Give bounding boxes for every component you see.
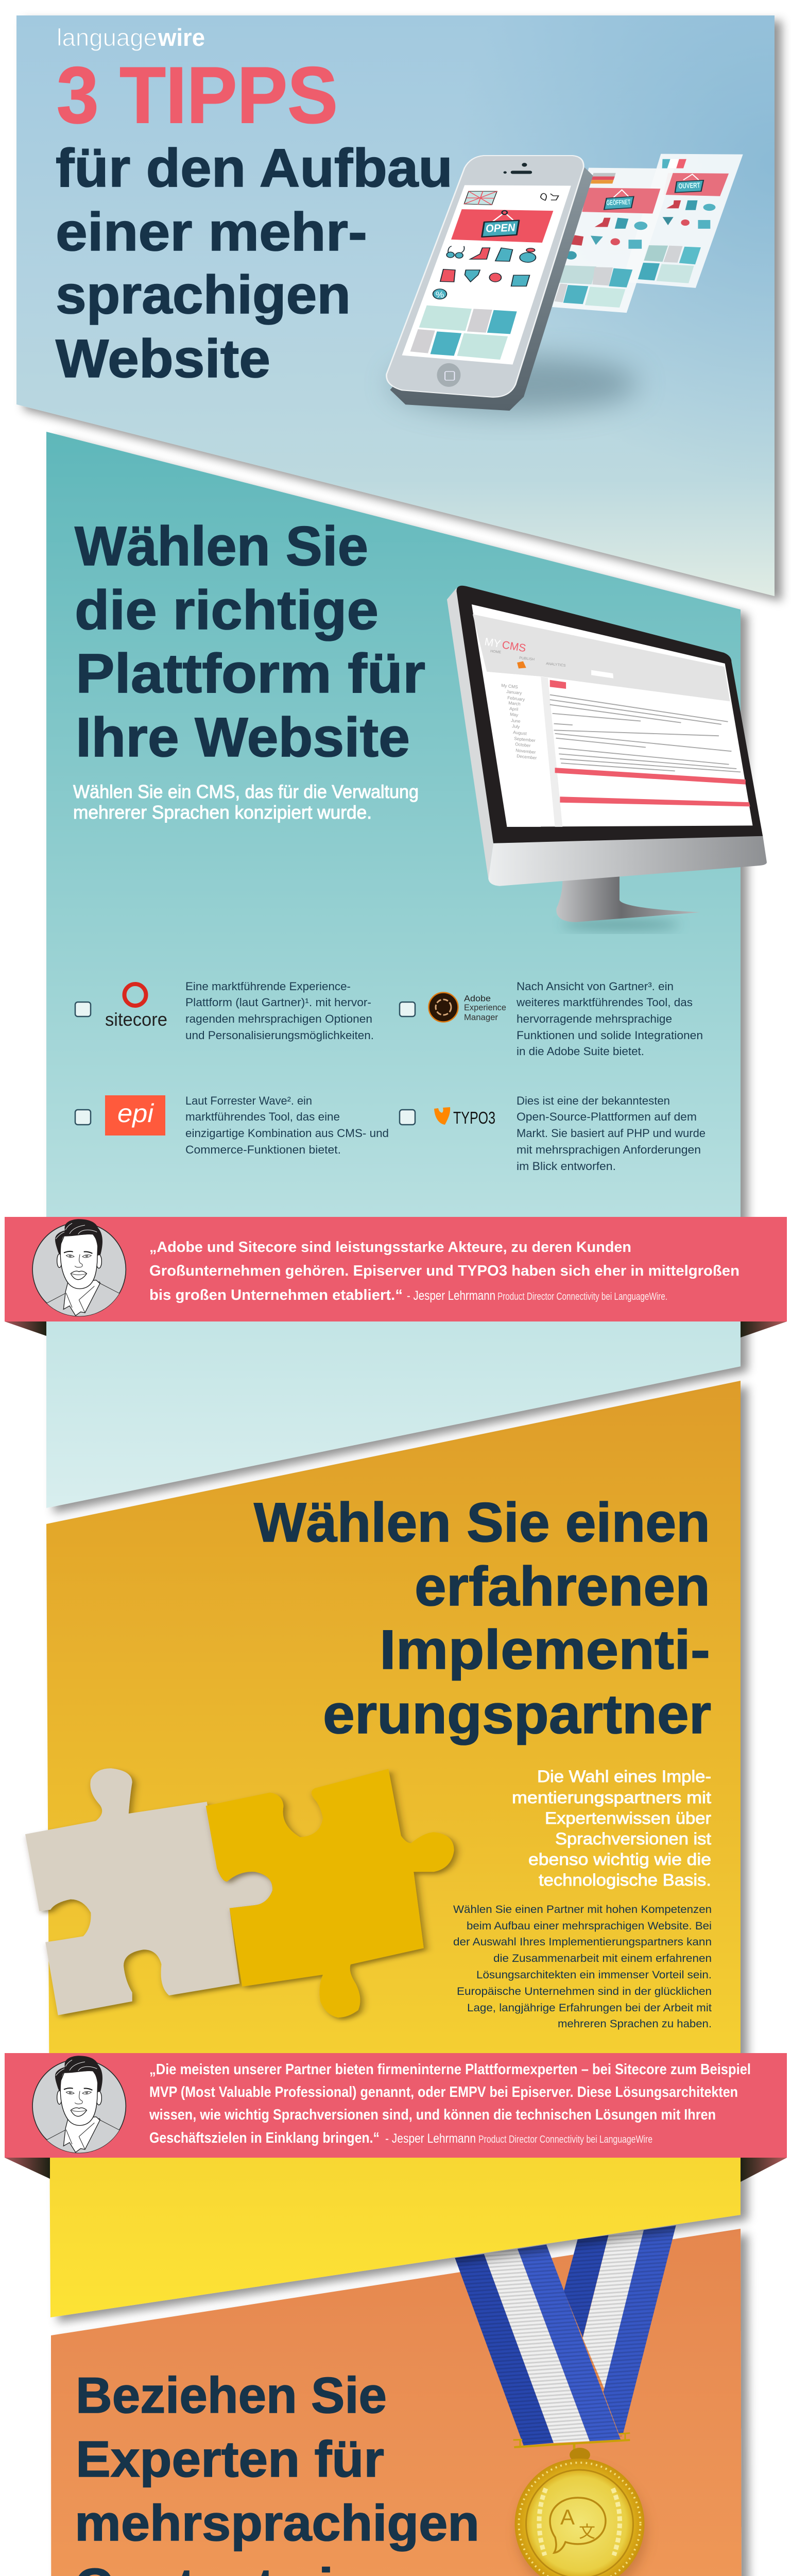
logo: Adobe: Adobe xyxy=(464,993,491,1004)
description xyxy=(185,1094,389,1156)
description: Markt. Sie basiert auf PHP und wurde xyxy=(517,1127,706,1140)
title: sprachigen xyxy=(56,265,351,325)
translate speech bubble: 文 xyxy=(579,2522,595,2541)
checkbox xyxy=(400,1002,415,1016)
platform option: TYPO3 xyxy=(400,1094,706,1173)
text block: Implementierungspartner intro: Expertenwissen über xyxy=(545,1809,711,1827)
text block: Implementierungspartner intro: Sprachversionen ist xyxy=(555,1829,711,1848)
heading: mehrsprachiger Content: Experten für xyxy=(76,2431,384,2487)
heading: Plattform: Ihre Website xyxy=(76,706,410,768)
description: Nach Ansicht von Gartner³. ein xyxy=(517,980,674,993)
text block: CMS intro: mehrerer Sprachen konzipiert wurde. xyxy=(73,802,372,823)
text block: Implementierungspartner intro xyxy=(512,1767,711,1889)
CMS header xyxy=(473,614,730,701)
heading: Plattform xyxy=(75,515,425,768)
title: 3 TIPPS xyxy=(57,50,338,140)
checkbox xyxy=(75,1002,91,1016)
description: mit mehrsprachigen Anforderungen xyxy=(517,1143,701,1156)
CMS labels: HOME xyxy=(490,650,502,654)
illustration: smartphone with localized shop pages xyxy=(387,154,743,411)
logo: Sitecore: sitecore xyxy=(105,1009,167,1030)
heading: Implementierungspartner: Implementi- xyxy=(380,1618,710,1681)
portrait xyxy=(21,1219,141,1331)
text block: Implementierungspartner body: Europäische Unternehmen sind in der glücklichen xyxy=(457,1986,712,1997)
description: Commerce-Funktionen bietet. xyxy=(185,1143,341,1156)
logo: Adobe xyxy=(428,992,506,1022)
CMS labels: ANALYTICS xyxy=(546,662,566,668)
CMS labels: March xyxy=(508,700,521,706)
translate speech bubble xyxy=(550,2498,606,2553)
quote band 2 xyxy=(5,2053,787,2182)
description: marktführendes Tool, das eine xyxy=(185,1110,340,1123)
red banner with OPEN sign xyxy=(451,209,553,243)
panel 2: Plattform background xyxy=(46,432,741,1508)
logo: Adobe: Manager xyxy=(464,1012,498,1022)
heading: Plattform: die richtige xyxy=(75,579,379,641)
monitor screen xyxy=(472,604,753,827)
quote text: Geschäftszielen in Einklang bringen.“ xyxy=(149,2130,380,2146)
description: Laut Forrester Wave². ein xyxy=(185,1094,312,1107)
monitor bezel xyxy=(457,586,763,843)
text block: Implementierungspartner body: beim Aufbau einer mehrsprachigen Website. Bei xyxy=(467,1920,712,1932)
quote text: Product Director Connectivity bei LanguageWire xyxy=(478,2134,652,2145)
CMS labels xyxy=(490,650,566,760)
illustration: desktop monitor with CMS: MY xyxy=(484,636,502,650)
description: ragenden mehrsprachigen Optionen xyxy=(185,1012,372,1025)
CMS labels: July xyxy=(512,723,521,730)
heading: Implementierungspartner: Wählen Sie einen xyxy=(254,1491,710,1553)
illustration: desktop monitor with CMS xyxy=(447,586,767,929)
icon: gold medal xyxy=(515,2448,646,2576)
icon: medal ribbon xyxy=(455,2225,676,2453)
title: Website xyxy=(56,329,270,389)
UK flag xyxy=(464,191,497,205)
header logo: wire xyxy=(158,24,205,51)
platform option: Sitecore xyxy=(75,980,374,1042)
text block: Implementierungspartner body: Lösungsarchitekten ein immenser Vorteil sein. xyxy=(476,1969,712,1981)
grey puzzle piece xyxy=(25,1768,272,2015)
German page card: GEÖFFNET xyxy=(606,198,631,207)
heading: mehrsprachiger Content: mehrsprachigen xyxy=(75,2495,479,2551)
phone home button xyxy=(437,363,460,387)
text block: Implementierungspartner body: Lage, langjährige Erfahrungen bei der Arbeit mit xyxy=(467,2002,712,2014)
logo: TYPO3: TYPO3 xyxy=(453,1108,495,1127)
wreath xyxy=(539,2488,620,2555)
description: Funktionen und solide Integrationen xyxy=(517,1029,703,1042)
text block: Implementierungspartner body: Wählen Sie einen Partner mit hohen Kompetenzen xyxy=(453,1904,712,1916)
illustration: desktop monitor with CMS: CMS xyxy=(501,639,527,654)
title xyxy=(56,50,453,389)
title: einer mehr- xyxy=(56,202,367,262)
quote text: „Adobe und Sitecore sind leistungsstarke Akteure, zu deren Kunden xyxy=(149,1239,631,1256)
CMS labels: PUBLISH xyxy=(519,656,535,662)
yellow puzzle piece xyxy=(206,1769,454,2018)
heading: mehrsprachiger Content: Beziehen Sie xyxy=(76,2367,387,2424)
CMS labels: November xyxy=(515,748,536,755)
phone shadow xyxy=(391,355,639,412)
quote text: bis großen Unternehmen etabliert.“ xyxy=(149,1287,403,1303)
red banner with OPEN sign: OPEN xyxy=(485,222,516,235)
checkbox xyxy=(75,1110,91,1125)
logo: Episerver: epi xyxy=(117,1099,154,1128)
CMS labels: October xyxy=(515,741,531,748)
CMS labels: January xyxy=(506,689,523,696)
quote text xyxy=(149,2061,751,2146)
French page card: OUVERT xyxy=(678,181,701,190)
heading: mehrsprachiger Content xyxy=(75,2367,479,2576)
logo: Adobe: Experience xyxy=(464,1003,506,1012)
text block: Implementierungspartner intro: technologische Basis. xyxy=(539,1871,711,1889)
phone speaker and camera xyxy=(504,163,532,174)
header logo: language xyxy=(57,24,157,51)
panel 3: Implementierungspartner background xyxy=(46,1381,741,2317)
title: für den Aufbau xyxy=(56,138,453,198)
heading: Implementierungspartner xyxy=(254,1491,711,1745)
monitor silver frame xyxy=(447,588,493,879)
colour blocks xyxy=(410,306,517,360)
quote text: Großunternehmen gehören. Episerver und TYPO3 haben sich eher in mittelgroßen xyxy=(149,1263,740,1279)
text block: Implementierungspartner intro: Die Wahl eines Imple- xyxy=(537,1767,711,1786)
text block: CMS intro: Wählen Sie ein CMS, das für die Verwaltung xyxy=(73,781,419,802)
description: einzigartige Kombination aus CMS- und xyxy=(185,1127,389,1140)
quote text: - Jesper Lehrmann xyxy=(385,2131,476,2146)
heading: Plattform: Plattform für xyxy=(76,642,425,704)
panel 1: title background xyxy=(16,15,775,596)
CMS red bars xyxy=(555,768,750,806)
heading: Plattform: Wählen Sie xyxy=(75,515,368,577)
description: Dies ist eine der bekanntesten xyxy=(517,1094,670,1107)
heading: Implementierungspartner: erungspartner xyxy=(323,1683,711,1745)
monitor stand xyxy=(556,876,700,922)
CMS labels: May xyxy=(510,711,519,718)
phone screen xyxy=(402,185,571,365)
ribbon folds xyxy=(5,1321,787,1337)
shop product icons xyxy=(433,246,536,299)
ribbon folds xyxy=(5,2158,787,2182)
CMS body text lines xyxy=(550,695,741,772)
logo: Episerver xyxy=(105,1095,165,1136)
quote text: Product Director Connectivity bei LanguageWire. xyxy=(497,1291,667,1302)
description xyxy=(516,980,703,1058)
description: hervorragende mehrsprachige xyxy=(517,1012,672,1025)
checkbox xyxy=(400,1110,415,1125)
CMS labels: September xyxy=(514,736,536,743)
pin and cart icons xyxy=(541,193,559,200)
header logo xyxy=(57,24,205,51)
description xyxy=(185,980,374,1042)
text block: Implementierungspartner body: die Zusammenarbeit mit einem erfahrenen xyxy=(493,1953,712,1964)
platform option: Episerver xyxy=(75,1094,389,1156)
text block: Implementierungspartner intro: ebenso wichtig wie die xyxy=(528,1850,711,1869)
quote text xyxy=(149,1239,740,1303)
CMS labels: My CMS xyxy=(501,683,519,689)
panel 4: mehrsprachiger Content background xyxy=(51,2229,743,2576)
CMS labels: December xyxy=(517,753,537,760)
text block: Implementierungspartner body: der Auswahl Ihres Implementierungspartners kann xyxy=(453,1936,712,1948)
quote text: wissen, wie wichtig Sprachversionen sind, und können die technischen Lösungen mit Ihren xyxy=(149,2107,716,2123)
CMS labels: June xyxy=(511,718,521,724)
quote band 1 xyxy=(5,1217,787,1337)
French page card xyxy=(622,154,743,288)
description: Open-Source-Plattformen auf dem xyxy=(517,1110,697,1123)
heading: Implementierungspartner: erfahrenen xyxy=(415,1555,710,1617)
illustration: smartphone with localized shop pages: % xyxy=(436,290,444,300)
portrait xyxy=(21,2056,141,2167)
description: in die Adobe Suite bietet. xyxy=(517,1045,644,1058)
text block: Implementierungspartner body xyxy=(453,1904,712,2030)
description xyxy=(517,1094,706,1173)
description: Plattform (laut Gartner)¹. mit hervor- xyxy=(185,996,371,1009)
description: weiteres marktführendes Tool, das xyxy=(516,996,693,1009)
text block: CMS intro xyxy=(73,781,419,823)
phone body xyxy=(390,167,593,411)
platform option: Adobe Experience Manager xyxy=(400,980,703,1058)
description: im Blick entworfen. xyxy=(517,1160,616,1173)
logo: TYPO3 xyxy=(434,1107,495,1127)
CMS labels: April xyxy=(509,706,519,712)
CMS labels: February xyxy=(507,695,525,702)
CMS labels: August xyxy=(513,730,527,736)
German page card xyxy=(552,168,675,313)
illustration: puzzle pieces xyxy=(25,1768,454,2018)
text block: Implementierungspartner intro: mentierungspartners mit xyxy=(512,1788,711,1807)
description: und Personalisierungsmöglichkeiten. xyxy=(185,1029,374,1042)
description: Eine marktführende Experience- xyxy=(185,980,351,993)
logo: Sitecore xyxy=(105,984,167,1030)
translate speech bubble: A xyxy=(560,2505,575,2529)
text block: Implementierungspartner body: mehreren Sprachen zu haben. xyxy=(558,2018,712,2030)
quote text: - Jesper Lehrmann xyxy=(407,1289,495,1303)
